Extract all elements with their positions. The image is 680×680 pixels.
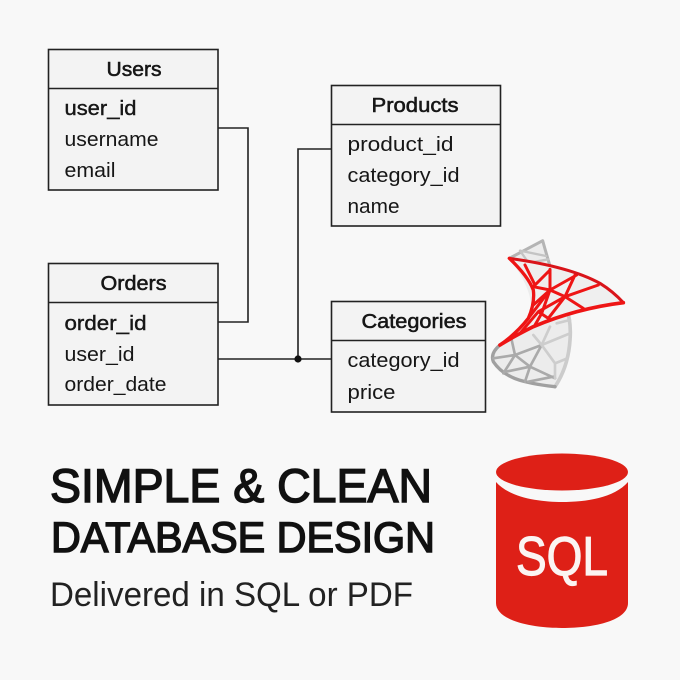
table: Categories: category_id xyxy=(348,349,460,372)
connector: users to orders xyxy=(218,128,248,322)
table: Categories xyxy=(332,302,486,412)
heading: SIMPLE & CLEAN xyxy=(50,460,432,513)
table: Users: user_id xyxy=(64,97,136,120)
table: Categories: price xyxy=(348,381,396,404)
table: Orders xyxy=(48,264,218,405)
junction dot xyxy=(294,355,302,363)
table: Users xyxy=(48,50,218,190)
table: Orders: order_id xyxy=(64,312,146,335)
table: Orders: Orders xyxy=(100,272,166,295)
table: Orders: order_date xyxy=(64,373,166,396)
table: Orders: user_id xyxy=(64,343,134,366)
cylinder top xyxy=(496,454,628,490)
table: Products xyxy=(332,86,500,226)
table: Users: email xyxy=(64,159,116,182)
heading xyxy=(50,460,435,562)
SQL label: SQL xyxy=(516,525,608,587)
table: Users: username xyxy=(64,128,158,151)
table: Products: category_id xyxy=(348,164,460,187)
logo: gray ribbon xyxy=(492,241,570,387)
icon: SQL database cylinder xyxy=(496,454,628,628)
table: Products: name xyxy=(348,195,400,218)
heading: DATABASE DESIGN xyxy=(51,515,435,562)
subheading: Delivered in SQL or PDF xyxy=(50,576,413,614)
table: Products: Products xyxy=(372,94,458,117)
cylinder body xyxy=(496,482,628,628)
table: Categories: Categories xyxy=(362,310,466,333)
table: Products: product_id xyxy=(348,133,454,156)
logo: red ribbon xyxy=(500,258,623,345)
table: Users: Users xyxy=(106,58,162,81)
connector: orders to categories and products xyxy=(218,149,331,363)
icon: SQL Server logo xyxy=(492,241,623,387)
